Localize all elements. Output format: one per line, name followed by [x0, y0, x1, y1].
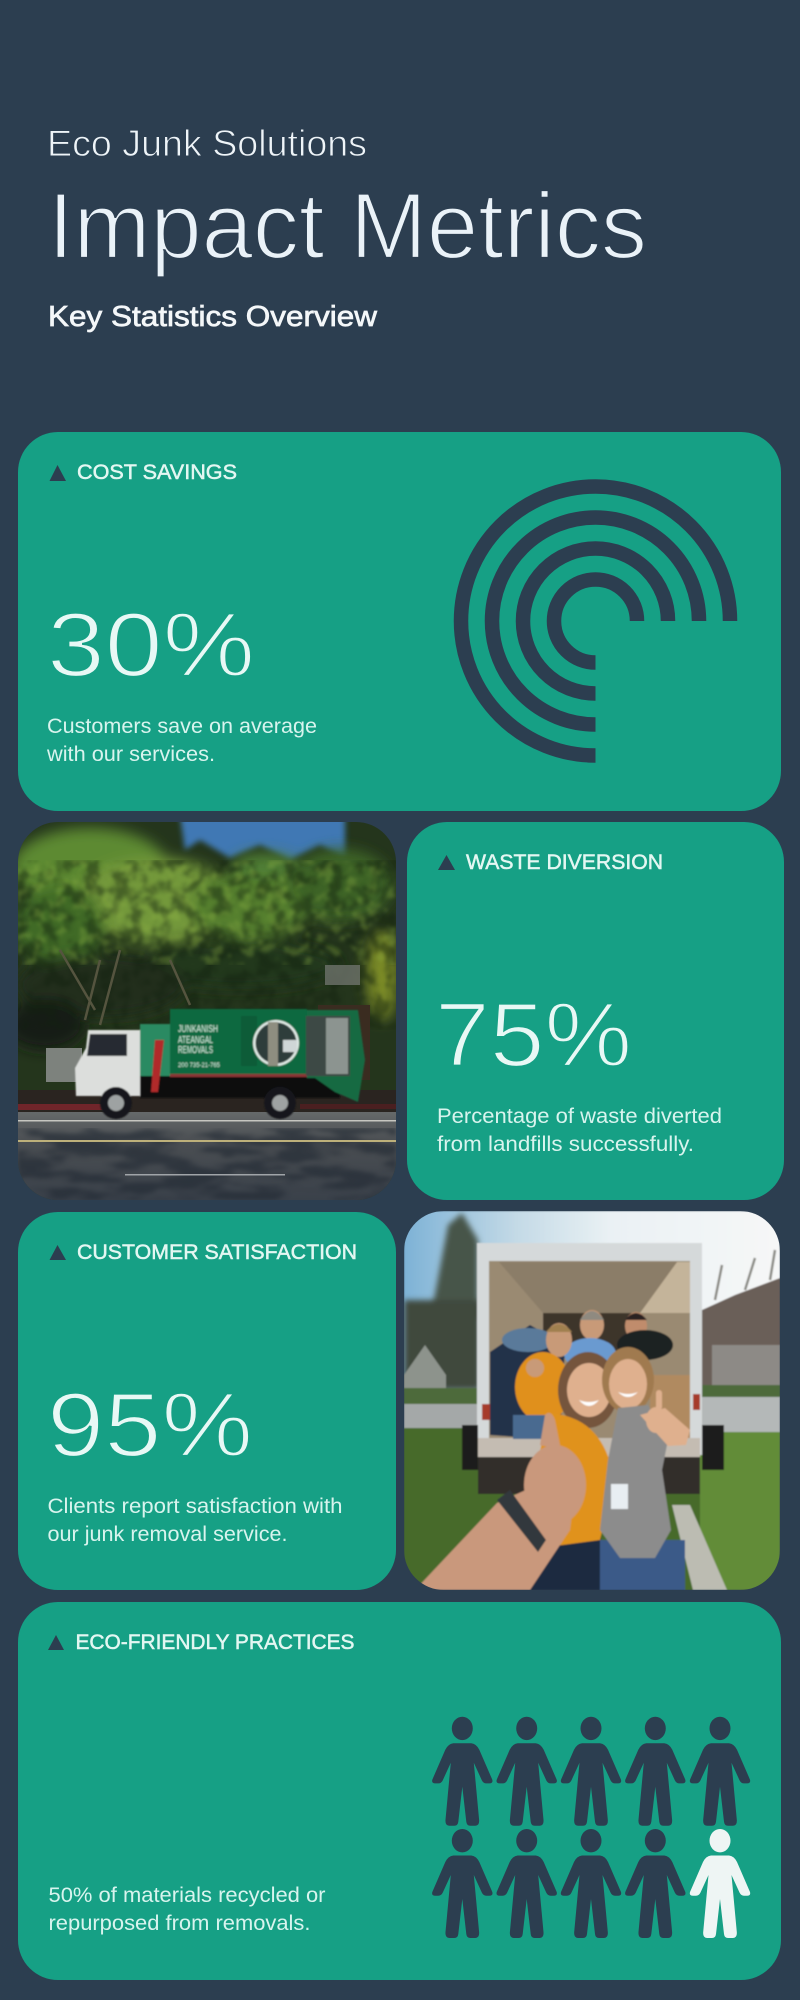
chart: concentric radial arcs [461, 486, 730, 756]
truck signage: 200 735-21-765 [178, 1062, 220, 1069]
crew in the truck [580, 1310, 604, 1340]
stat: 30%: 30% [47, 595, 255, 696]
truck [75, 1009, 365, 1119]
heading: waste diversion: WASTE DIVERSION [466, 851, 663, 874]
truck signage: JUNKANISH [178, 1024, 218, 1035]
front woman in grey [602, 1347, 654, 1413]
description: Clients report satisfaction with [48, 1494, 342, 1518]
icon: triangle [50, 1245, 66, 1260]
icon: triangle [438, 855, 455, 870]
heading: customer satisfaction: CUSTOMER SATISFACTION [77, 1241, 357, 1264]
truck box [477, 1243, 702, 1455]
main title: Impact Metrics [48, 173, 647, 278]
icon: triangle [50, 465, 66, 481]
front woman in orange [558, 1352, 618, 1428]
truck signage: REMOVALS [178, 1045, 213, 1056]
description: our junk removal service. [48, 1522, 288, 1546]
neighbourhood backdrop [432, 1213, 478, 1320]
header: brand and title [47, 123, 647, 333]
stat: 75%: 75% [435, 985, 632, 1086]
road [18, 1112, 396, 1200]
panel: customer satisfaction [18, 1212, 396, 1590]
subtitle: Key Statistics Overview [48, 301, 377, 333]
description: from landfills successfully. [437, 1132, 694, 1156]
brand name: Eco Junk Solutions [47, 123, 367, 164]
pictogram: ten people, nine dark and one light [432, 1717, 750, 1938]
description: Customers save on average [47, 714, 317, 738]
photo: happy crew with thumbs up in front of a moving truck [404, 1211, 780, 1590]
icon: triangle [48, 1635, 64, 1650]
description: repurposed from removals. [48, 1911, 310, 1935]
panel: cost savings [18, 432, 781, 811]
stat: 95%: 95% [47, 1375, 253, 1476]
description: with our services. [46, 742, 215, 766]
description: Percentage of waste diverted [437, 1104, 722, 1128]
panel: eco-friendly practices [18, 1602, 781, 1980]
truck signage: ATEANGAL [178, 1035, 213, 1046]
photo: junk removal truck on a tree-lined street [5, 815, 398, 1200]
description: 50% of materials recycled or [48, 1883, 326, 1907]
heading: eco-friendly practices: ECO-FRIENDLY PRACTICES [76, 1631, 354, 1654]
heading: cost savings: COST SAVINGS [77, 461, 237, 484]
foreground arm and thumb [420, 1490, 572, 1590]
truck signage [178, 1024, 220, 1069]
panel: waste diversion [407, 822, 784, 1200]
